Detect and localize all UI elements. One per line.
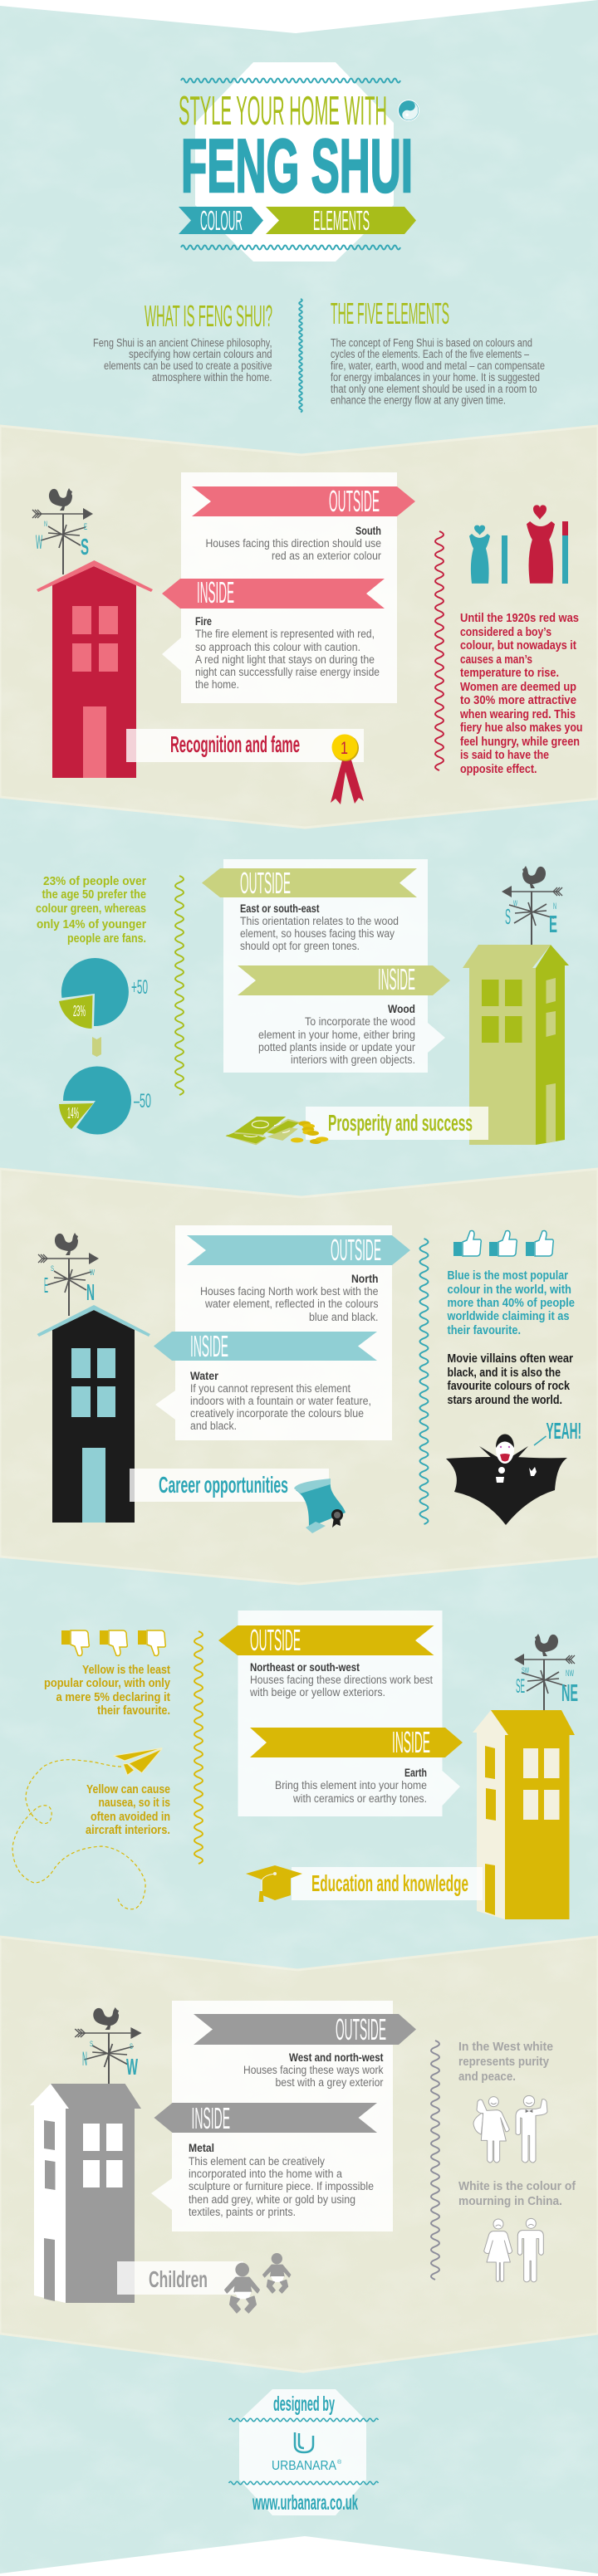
text: metal: sculpture or furniture piece. If impossible: [189, 2180, 374, 2192]
label: education and knowledge: Education and knowledge: [311, 1870, 468, 1896]
text: blue fact: colour in the world, with: [447, 1283, 571, 1297]
text: west: Houses facing these ways work: [243, 2064, 384, 2076]
icon: yin yang: [395, 97, 422, 124]
text: earth: [275, 1767, 427, 1805]
text: east: [240, 902, 399, 952]
text: red fact: temperature to rise.: [460, 666, 559, 680]
text: south: Houses facing this direction should use: [206, 537, 381, 550]
text: south: [206, 525, 381, 562]
text: green fact: [36, 874, 146, 946]
text: blue fact: worldwide claiming it as: [447, 1309, 570, 1323]
label: career opportunities: Career opportunities: [159, 1472, 288, 1498]
text: west: best with a grey exterior: [276, 2076, 384, 2089]
panel: earth text card: [238, 1611, 460, 1816]
text: nausea fact: aircraft interiors.: [86, 1823, 170, 1837]
icon: weathervane north-east: NW: [566, 1669, 574, 1679]
text: north: North: [351, 1273, 379, 1285]
ribbon: inside: INSIDE: [190, 1329, 228, 1363]
icon: weathervane south: E: [84, 522, 87, 532]
pie chart: under 50: [59, 1067, 151, 1135]
pie chart: over 50: [59, 958, 148, 1029]
text block: the five elements: [331, 296, 545, 407]
icon: weathervane west: S: [130, 2042, 133, 2051]
text block: what is feng shui: Feng Shui is an ancient Chinese philosophy,: [93, 337, 272, 349]
text: wood: potted plants inside or update your: [258, 1041, 415, 1053]
pie chart: under 50: –50: [134, 1090, 151, 1112]
panel: metal section: [30, 2001, 416, 2313]
text: fire: [195, 615, 380, 691]
text: metal: then add grey, white or gold by using: [189, 2193, 355, 2206]
text: red fact: is said to have the: [460, 748, 549, 762]
icon: money and coins: [226, 1117, 328, 1145]
ribbon: inside: [154, 1329, 377, 1363]
text: fire: so approach this colour with caution.: [195, 641, 360, 653]
text: fire: the home.: [195, 678, 239, 691]
panel: wood section: +50: [131, 976, 148, 999]
icon: green house: [463, 945, 569, 1145]
text block: the five elements: fire, water, earth, wood and metal – can compensate: [331, 359, 545, 372]
icon: weathervane east: W: [513, 899, 517, 907]
text block: what is feng shui: elements can be used to create a positive: [104, 359, 272, 372]
text: white purity fact: represents purity: [458, 2055, 550, 2069]
text: green fact: the age 50 prefer the: [42, 887, 146, 902]
text: blue fact: [447, 1268, 575, 1337]
icon: dresses and bars: [469, 505, 568, 584]
icon: thumbs down: [61, 1630, 165, 1655]
text: northeast: [249, 1661, 433, 1699]
text: red fact: causes a man’s: [460, 653, 532, 667]
icon: red house: [37, 560, 153, 778]
text: white mourning fact: [458, 2179, 576, 2208]
text: NE: [561, 1680, 578, 1707]
icon: weathervane north: W: [90, 1268, 95, 1278]
icon: weathervane south: N: [44, 520, 47, 528]
text: metal: textiles, paints or prints.: [189, 2206, 296, 2218]
icon: weathervane north-east: SE: [516, 1675, 525, 1698]
text: metal: [189, 2142, 374, 2218]
text: red fact: opposite effect.: [460, 762, 537, 776]
text block: what is feng shui: [93, 299, 272, 384]
text: white mourning fact: mourning in China.: [458, 2194, 562, 2208]
panel: wood text card: [223, 859, 445, 1073]
ribbon: outside: [194, 2012, 416, 2046]
label: prosperity and success: [306, 1107, 488, 1140]
text: water: creatively incorporate the colours blue: [190, 1407, 364, 1420]
icon: babies: [225, 2253, 291, 2313]
icon: graduation cap: [246, 1865, 302, 1902]
label: education and knowledge: [292, 1867, 483, 1900]
text: water: indoors with a fountain or water feature,: [190, 1395, 371, 1407]
text: blue fact: Blue is the most popular: [447, 1268, 568, 1283]
icon: mourning couple: [484, 2218, 543, 2282]
icon: thumbs up: [453, 1230, 553, 1256]
panel: water section: [37, 1225, 410, 1533]
text: green fact: 23% of people over: [43, 874, 146, 888]
text: north: water element, reflected in the colours: [204, 1298, 379, 1310]
ribbon: inside: [154, 2101, 377, 2135]
text: yellow fact: a mere 5% declaring it: [56, 1690, 170, 1704]
text block: the five elements: cycles of the elements. Each of the five elements –: [331, 348, 529, 360]
ribbon: outside: OUTSIDE: [250, 1623, 301, 1657]
icon: weathervane north: N: [86, 1279, 95, 1305]
text: wood: To incorporate the wood: [305, 1015, 415, 1028]
text block: the five elements: for energy imbalances in your home. It is suggested: [331, 371, 540, 384]
text: yellow fact: their favourite.: [97, 1703, 170, 1718]
panel: earth section: [12, 1611, 578, 1919]
icon: weathervane west: N: [82, 2048, 87, 2070]
icon: weathervane south: W: [36, 531, 42, 554]
ribbon: outside: OUTSIDE: [331, 1233, 381, 1267]
icon: weathervane south: [32, 488, 93, 574]
icon: black house: [37, 1305, 150, 1523]
ribbon: outside: OUTSIDE: [336, 2012, 386, 2046]
pie chart: over 50: 23%: [73, 1003, 86, 1019]
icon: weathervane east: E: [549, 912, 557, 938]
pie chart: under 50: 14%: [67, 1105, 79, 1122]
text: west: West and north-west: [289, 2051, 384, 2064]
label: prosperity and success: Prosperity and success: [328, 1110, 473, 1136]
label: children: Children: [149, 2266, 208, 2292]
text: black fact: stars around the world.: [447, 1393, 562, 1407]
label: recognition and fame: Recognition and fame: [170, 731, 300, 757]
text: fire: night can successfully raise energy inside: [195, 666, 380, 678]
icon: weathervane north-east: SW: [522, 1666, 529, 1674]
icon: weathervane east: N: [553, 902, 556, 912]
text: north: [200, 1273, 379, 1323]
text: green fact: colour green, whereas: [36, 902, 146, 916]
text: blue fact: their favourite.: [447, 1323, 521, 1337]
text: northeast: Northeast or south-west: [250, 1661, 360, 1674]
text: red fact: considered a boy’s: [460, 625, 551, 639]
icon: yellow house: [473, 1710, 575, 1919]
text: black fact: black, and it is also the: [447, 1366, 561, 1380]
text: black fact: Movie villains often wear: [447, 1352, 573, 1366]
text: yellow fact: [44, 1663, 171, 1718]
text: white purity fact: In the West white: [458, 2040, 553, 2054]
ribbon: inside: INSIDE: [392, 1725, 430, 1759]
text: north: Houses facing North work best with the: [200, 1285, 379, 1298]
text: black fact: [447, 1352, 573, 1407]
text block: the five elements: enhance the energy flow at any given time.: [331, 393, 506, 407]
text: south: red as an exterior colour: [272, 550, 381, 562]
ribbon: inside: [250, 1725, 463, 1759]
label: children: [117, 2261, 243, 2295]
text: nausea fact: Yellow can cause: [86, 1782, 170, 1796]
icon: bride and groom: [473, 2095, 547, 2163]
text: designed by: designed by: [273, 2393, 335, 2416]
icon: scroll: [294, 1479, 346, 1533]
text: south: South: [355, 525, 381, 537]
panel: fire section: [32, 472, 415, 804]
text: earth: Earth: [404, 1767, 427, 1779]
ribbon: colour: COLOUR: [200, 205, 243, 236]
text: fire: A red night light that stays on during the: [195, 653, 375, 666]
text: northeast: Houses facing these directions work best: [250, 1674, 433, 1686]
text: fire: The fire element is represented with red,: [195, 628, 375, 640]
text: north: blue and black.: [309, 1311, 379, 1323]
text: nausea fact: nausea, so it is: [98, 1796, 170, 1810]
icon: weathervane north: E: [44, 1273, 48, 1298]
icon: weathervane south: S: [81, 534, 89, 560]
text: metal: Metal: [189, 2142, 214, 2154]
text: fire: Fire: [195, 615, 212, 628]
text block: the five elements: that only one element should be used in a room to: [331, 383, 537, 395]
text: website: www.urbanara.co.uk: [252, 2491, 358, 2515]
text: east: East or south-east: [240, 902, 320, 915]
title block: [179, 62, 422, 262]
text: water: [190, 1370, 371, 1432]
icon: medal: [331, 734, 364, 804]
text: red fact: colour, but nowadays it: [460, 638, 576, 653]
ribbon: elements: ELEMENTS: [313, 205, 370, 236]
text: nausea fact: [86, 1782, 170, 1837]
text: white purity fact: [458, 2040, 553, 2084]
text: earth: with ceramics or earthy tones.: [292, 1792, 427, 1805]
text: wood: element in your home, either bring: [258, 1029, 415, 1041]
logo: urbanara: [272, 2432, 342, 2473]
ribbon: outside: OUTSIDE: [240, 866, 291, 900]
icon: weathervane north: [38, 1233, 99, 1316]
text: red fact: to 30% more attractive: [460, 693, 576, 707]
text: nausea fact: often avoided in: [91, 1810, 170, 1824]
text: wood: [258, 1003, 415, 1066]
logo: urbanara: URBANARA: [272, 2459, 336, 2473]
panel: water text card: [155, 1225, 392, 1440]
text: white mourning fact: White is the colour of: [458, 2179, 576, 2193]
text: east: should opt for green tones.: [240, 940, 360, 952]
ribbon: outside: [192, 484, 415, 518]
text: red fact: Until the 1920s red was: [460, 611, 579, 625]
text: metal: This element can be creatively: [189, 2155, 325, 2168]
text: wood: interiors with green objects.: [291, 1053, 415, 1066]
icon: weathervane west: S: [90, 2040, 93, 2048]
panel: wood section: [36, 859, 569, 1145]
text: water: If you cannot represent this element: [190, 1382, 350, 1395]
text: red fact: when wearing red. This: [459, 707, 576, 721]
text: east: element, so houses facing this way: [240, 927, 395, 940]
ribbon: inside: INSIDE: [378, 962, 415, 996]
label: recognition and fame: [126, 729, 364, 762]
text: black fact: favourite colours of rock: [447, 1379, 571, 1393]
heading: feng shui: FENG SHUI: [181, 125, 413, 208]
ribbon: outside: [187, 1233, 410, 1267]
icon: paper plane with dashed trail: [12, 1748, 162, 1909]
ribbon: inside: [162, 575, 385, 609]
text: east: This orientation relates to the wood: [240, 915, 399, 927]
logo: urbanara: ®: [337, 2459, 342, 2466]
text: water: and black.: [190, 1420, 237, 1432]
icon: weathervane east: S: [505, 904, 511, 929]
text: red fact: Women are deemed up: [460, 680, 576, 694]
icon: weathervane east: [502, 866, 562, 945]
ribbon: inside: INSIDE: [197, 575, 234, 609]
arrow: pie comparison: [92, 1037, 101, 1057]
panel: fire text card: [162, 472, 397, 703]
icon: weathervane west: [75, 2007, 142, 2084]
text: red fact: feel hungry, while green: [460, 735, 580, 749]
text block: what is feng shui: atmosphere within the home.: [152, 371, 272, 384]
text: yellow fact: popular colour, with only: [44, 1676, 171, 1690]
text: wood: Wood: [388, 1003, 415, 1015]
text: yellow fact: Yellow is the least: [82, 1663, 170, 1677]
text: earth: Bring this element into your home: [275, 1779, 427, 1791]
label: career opportunities: [130, 1469, 329, 1502]
text: metal: incorporated into the home with a: [189, 2168, 342, 2180]
ribbon: elements: [266, 205, 416, 236]
icon: medal: 1: [341, 739, 348, 758]
text: red fact: [459, 611, 583, 776]
ribbon: outside: OUTSIDE: [329, 484, 380, 518]
text: green fact: people are fans.: [67, 931, 146, 946]
text: northeast: with beige or yellow exteriors.: [249, 1686, 385, 1699]
ribbon: outside: [218, 1623, 434, 1657]
text: blue fact: more than 40% of people: [447, 1296, 575, 1310]
icon: weathervane north-east: [514, 1634, 578, 1710]
callout: yeah: [534, 1418, 581, 1445]
text: WHAT IS FENG SHUI?: [145, 299, 272, 333]
text: west: [243, 2051, 384, 2089]
icon: vampire: [446, 1435, 567, 1525]
text block: what is feng shui: specifying how certain colours and: [129, 348, 272, 360]
ribbon: outside: [202, 866, 417, 900]
panel: metal text card: [151, 2001, 393, 2231]
ribbon: inside: [238, 962, 450, 996]
ribbon: inside: INSIDE: [191, 2101, 230, 2135]
text block: the five elements: The concept of Feng Shui is based on colours and: [331, 337, 532, 349]
icon: grey house: [30, 2084, 141, 2303]
ribbon: colour: [179, 205, 263, 236]
text: water: Water: [190, 1370, 219, 1382]
icon: weathervane west: W: [126, 2054, 138, 2080]
text: white purity fact: and peace.: [458, 2070, 516, 2084]
footer badge: designed by: [229, 2389, 379, 2515]
text: green fact: only 14% of younger: [37, 917, 146, 931]
icon: weathervane north: S: [51, 1264, 54, 1273]
